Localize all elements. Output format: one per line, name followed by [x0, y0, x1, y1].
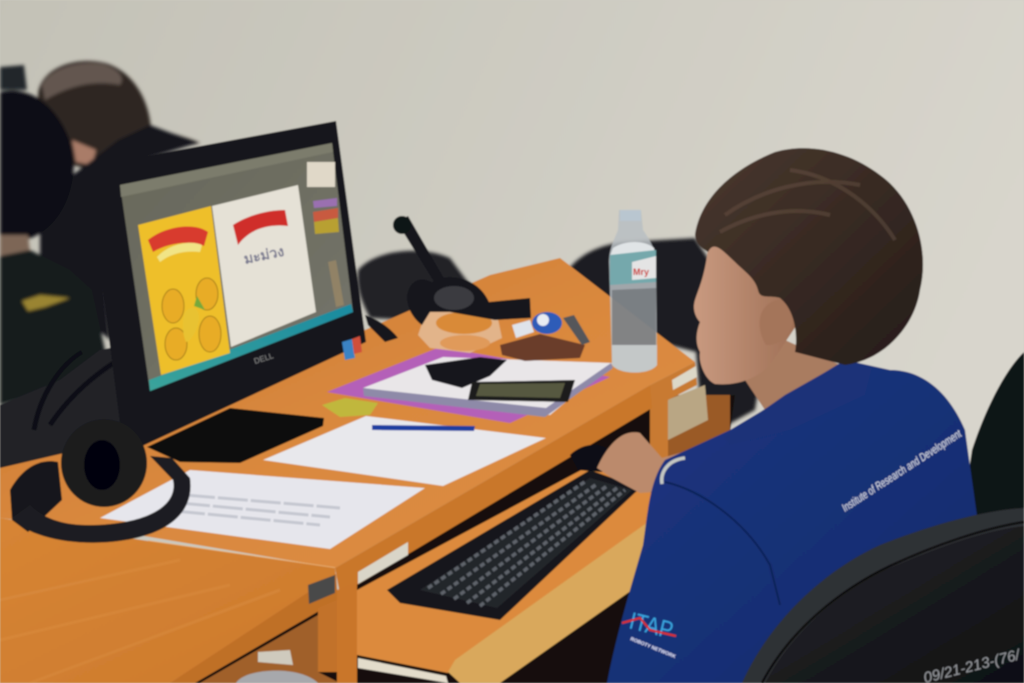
icon: mouse under hand: [570, 445, 614, 472]
wired small mic: [365, 315, 398, 342]
monitor body: [87, 121, 366, 448]
monitor: [87, 121, 366, 463]
color swatches panel: [307, 162, 344, 307]
panel: purple folder and notebook: [327, 347, 613, 423]
drawer slide under tray: [358, 658, 448, 683]
desk label plates: [308, 575, 335, 604]
water bottle: [609, 210, 657, 372]
brand logo: DELL: [253, 351, 275, 366]
monitor stand: [147, 408, 324, 463]
panel: wooden desk right side and shelf: [650, 362, 730, 465]
drawer front rail: [448, 522, 649, 683]
ear: [760, 300, 794, 345]
foreground left man: [0, 91, 74, 240]
polo shirt: [607, 360, 979, 683]
remote: [563, 315, 590, 345]
wire bracket: [258, 650, 293, 665]
wallet: [500, 334, 585, 361]
background man head: [38, 61, 200, 170]
polo shirt: ROBOTY NETWORK: [629, 636, 677, 660]
sleeve seam: [665, 482, 780, 605]
clear food box with orange: [418, 305, 502, 353]
shirt embroidery: Institute of Research and Development: [840, 428, 965, 515]
panel: upper wooden desk top: [0, 258, 695, 568]
paper sheet left: [100, 470, 425, 549]
white artboard: [212, 185, 316, 347]
small blue toy: [512, 312, 562, 338]
dark under-desk backing: [170, 395, 735, 683]
lower desk cubby: [200, 615, 340, 683]
face: [694, 235, 800, 384]
hair: [695, 148, 923, 365]
icon: keyboard: [387, 470, 640, 620]
person at right: [597, 148, 979, 683]
background people: [0, 61, 200, 405]
bracelet: [662, 458, 685, 484]
panel: keyboard drawer tray: [357, 460, 655, 673]
blue red logo sticker: [342, 336, 362, 360]
left chair back with armrest: [0, 345, 150, 470]
panel: lower left desk top: [0, 518, 336, 683]
neck: [745, 340, 840, 410]
lower desk front strip: [170, 574, 338, 683]
candy wrapper: [322, 398, 378, 417]
arm and hand: [597, 432, 690, 493]
desk seam line: [148, 541, 335, 568]
yellow artboard: [138, 206, 230, 375]
black bag: [561, 238, 760, 428]
ITAP logo: ITAP: [627, 608, 676, 644]
taskbar: [149, 304, 353, 391]
paper sheet right: [263, 416, 546, 486]
sticker label: [358, 542, 408, 584]
water bottle: Mry: [633, 267, 649, 277]
foreground office chair: [742, 508, 1024, 683]
smartphone: [468, 380, 575, 402]
icon: foreground headphones: [10, 419, 191, 543]
back headset chair: [358, 251, 470, 320]
screen: [120, 143, 353, 391]
computer mouse below: [236, 671, 318, 683]
pen: [372, 425, 475, 431]
icon: headset with mic on back desk: [393, 216, 531, 325]
toolbar: [120, 143, 333, 197]
far monitor corner: [0, 65, 27, 90]
collar: [725, 361, 872, 445]
desk post: [337, 582, 357, 683]
desk front edge: [335, 385, 652, 595]
white artboard: มะม่วง: [242, 243, 286, 267]
right black chair behind: [960, 352, 1024, 530]
